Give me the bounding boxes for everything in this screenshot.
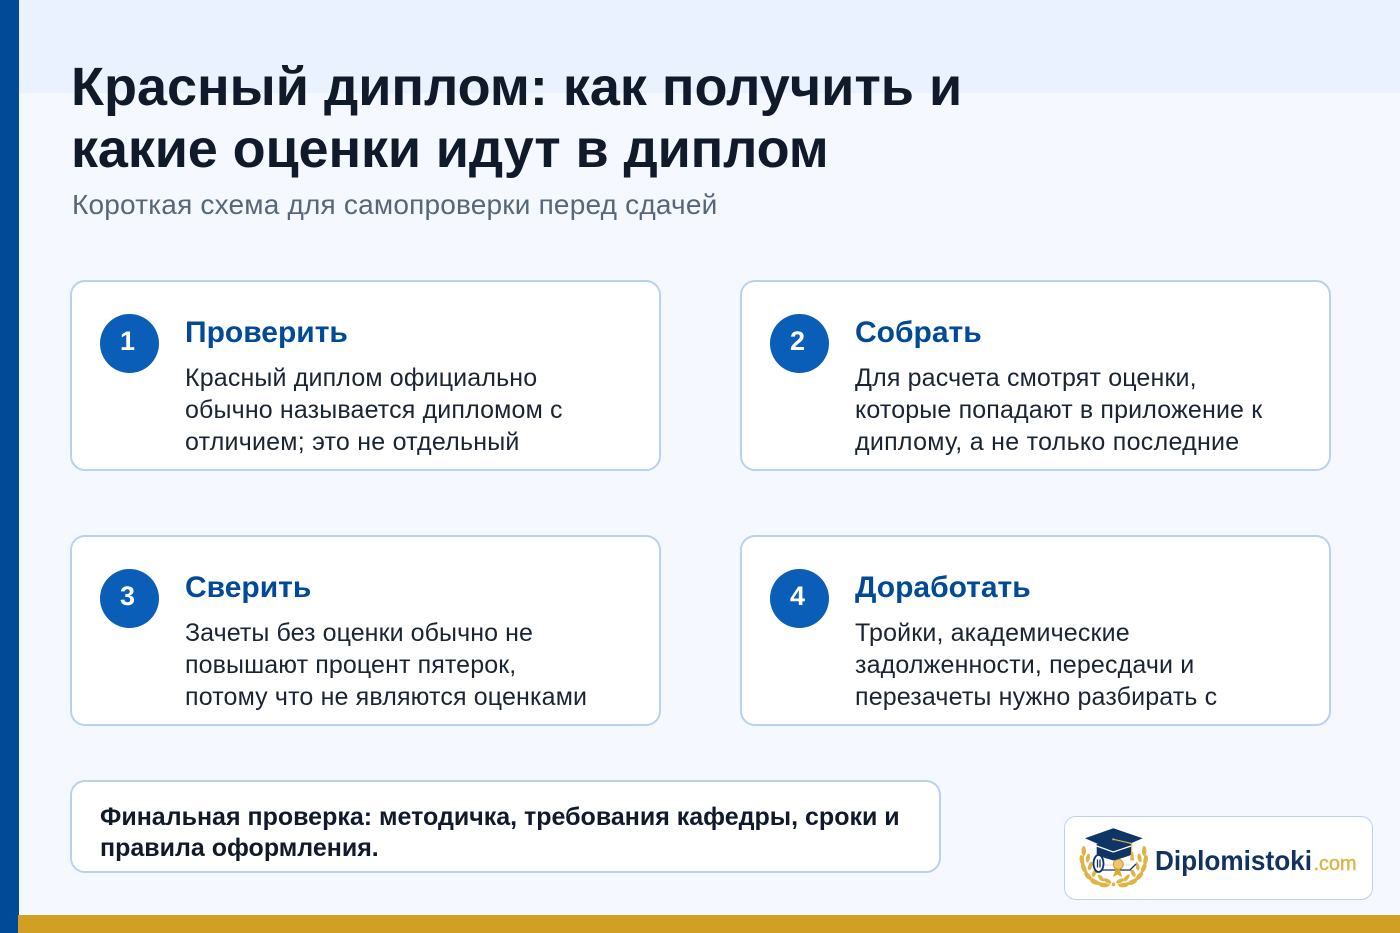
logo domain: .com [1314, 853, 1356, 875]
panel: step 4 [740, 535, 1331, 726]
step 1 text: отличием; это не отдельный [185, 428, 520, 456]
step 4 text [855, 619, 1217, 711]
callout text: правила оформления. [100, 834, 379, 862]
step 3 number: 3 [120, 581, 135, 611]
step 2 heading: Собрать [855, 316, 982, 349]
logo [1080, 828, 1356, 888]
callout text [100, 803, 900, 862]
step 3 text: Зачеты без оценки обычно не [185, 619, 533, 647]
icon: laurel wreath [1079, 846, 1149, 888]
callout: final check [70, 780, 941, 873]
icon: diploma scroll [1094, 852, 1136, 877]
step 1 number [100, 314, 159, 373]
callout text: Финальная проверка: методичка, требования кафедры, сроки и [100, 803, 900, 831]
step 2 text: которые попадают в приложение к [855, 396, 1262, 424]
panel: step 3 [70, 535, 661, 726]
step 4 text: задолженности, пересдачи и [855, 651, 1194, 679]
step 3 text [185, 619, 587, 711]
step 1 heading: Проверить [185, 316, 348, 349]
step 4 text: перезачеты нужно разбирать с [855, 683, 1217, 711]
step 1 text: обычно называется дипломом с [185, 396, 563, 424]
step 4 text: Тройки, академические [855, 619, 1130, 647]
step 1 text: Красный диплом официально [185, 364, 537, 392]
step 4 number [770, 569, 829, 628]
title: какие оценки идут в диплом [71, 119, 829, 179]
step 1 number: 1 [120, 326, 135, 356]
step 2 number: 2 [790, 326, 805, 356]
logo panel [1064, 816, 1373, 900]
logo wordmark: Diplomistoki [1155, 845, 1312, 876]
step 2 number [770, 314, 829, 373]
step 4 number: 4 [790, 581, 805, 611]
panel: step 2 [740, 280, 1331, 471]
step 2 text: Для расчета смотрят оценки, [855, 364, 1197, 392]
bottom gold bar [18, 915, 1400, 933]
step 3 text: потому что не являются оценками [185, 683, 587, 711]
icon: graduation cap [1085, 828, 1143, 860]
top band [19, 0, 1400, 93]
step 3 number [100, 569, 159, 628]
title [71, 57, 962, 179]
panel: step 1 [70, 280, 661, 471]
step 2 text: диплому, а не только последние [855, 428, 1239, 456]
step 3 text: повышают процент пятерок, [185, 651, 516, 679]
step 2 text [855, 364, 1262, 456]
step 4 heading: Доработать [855, 571, 1031, 604]
step 1 text [185, 364, 563, 456]
step 3 heading: Сверить [185, 571, 311, 604]
left accent bar [0, 0, 19, 933]
subtitle: Короткая схема для самопроверки перед сдачей [72, 189, 717, 220]
title: Красный диплом: как получить и [71, 57, 962, 117]
